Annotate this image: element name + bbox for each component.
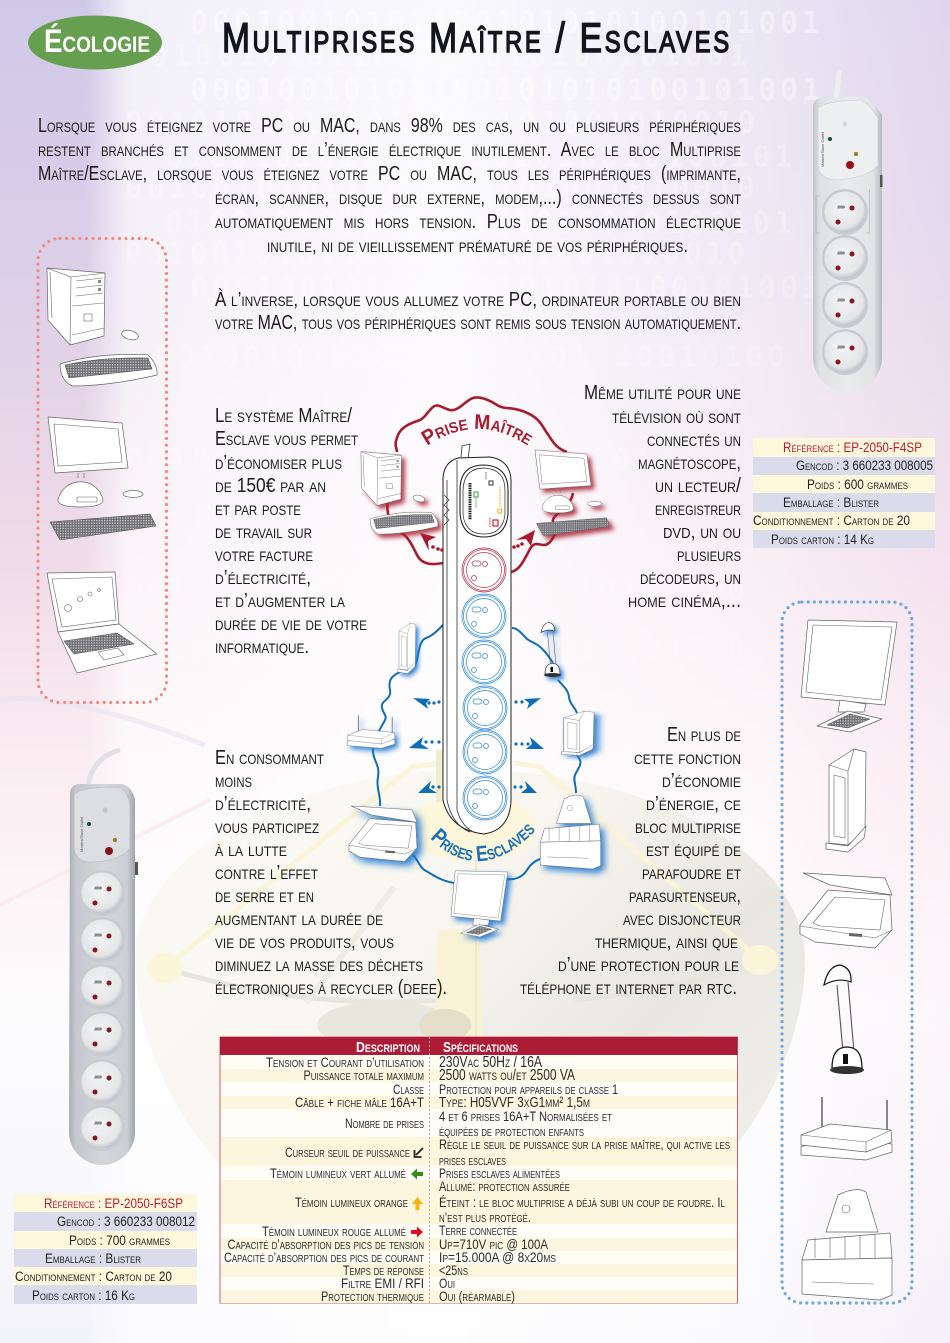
table: référence F4SP: Emballage : Blister xyxy=(783,495,879,510)
table column: spécifications: Règle le seuil de puissance sur la prise maître, qui active les xyxy=(439,1136,730,1152)
text block: effet de serre: vie de vos produits, vous xyxy=(215,931,394,953)
icon: disque dur gauche xyxy=(398,623,416,673)
table column: description: Capacité d’absorption des pics de courant xyxy=(224,1249,424,1265)
table column: spécifications: Allumé: protection assurée xyxy=(439,1178,570,1194)
text block: effet de serre: En consommant xyxy=(215,747,324,769)
text block: effet de serre: de serre et en xyxy=(215,885,314,907)
text block: protection: d’économie xyxy=(662,770,741,792)
table column: spécifications: Oui xyxy=(439,1275,455,1291)
table: référence F4SP xyxy=(753,438,935,548)
text block: système maître esclave: Le système Maître/ xyxy=(215,405,352,427)
text block: système maître esclave: d’électricité, xyxy=(215,567,311,589)
page background: 00100101011001010101001010010 xyxy=(125,171,755,206)
table header: Spécifications xyxy=(443,1039,518,1056)
text block: protection: téléphone et internet par RTC. xyxy=(520,977,737,999)
icon: multiprise au trait xyxy=(443,444,511,834)
table: référence F4SP: Référence : EP-2050-F4SP xyxy=(783,440,922,455)
text block: effet de serre: à la lutte xyxy=(215,839,287,861)
page background: 010010101100101010100101001 xyxy=(150,39,747,74)
icon: flèche orange xyxy=(412,1197,423,1210)
page background: 00101010110010101101001010010 xyxy=(125,106,755,141)
table column: spécifications: 2500 watts ou/et 2500 VA xyxy=(439,1067,575,1084)
text block: effet de serre: vous participez xyxy=(215,816,319,838)
text block: télévision: télévision où sont xyxy=(612,406,741,428)
table column: spécifications: Prises esclaves alimentées xyxy=(439,1165,560,1181)
icon: écran centre xyxy=(451,871,508,937)
intro paragraph: Lorsque vous éteignez votre PC ou MAC, dans 98% des cas, un ou plusieurs périphériques xyxy=(38,115,741,137)
icon: PC maître xyxy=(361,452,438,534)
icon: disque dur xyxy=(826,749,866,852)
text block: système maître esclave: Esclave vous permet xyxy=(215,428,358,450)
text block: effet de serre xyxy=(215,747,447,999)
page background: 00010010101100101010100101001 xyxy=(190,6,820,41)
panel: ordinateurs maîtres xyxy=(38,238,166,702)
table column: description: Puissance totale maximum xyxy=(304,1067,424,1083)
text block: télévision: DVD, un ou xyxy=(663,521,741,543)
intro paragraph: Maître/Esclave, lorsque vous éteignez votre PC ou MAC, tous les périphériques (imprimante, xyxy=(38,163,741,185)
table column: description: Protection thermique xyxy=(321,1288,424,1304)
table column: spécifications: n’est plus protégé. xyxy=(439,1209,531,1225)
page background: 001001010100101010100101001001 xyxy=(125,443,785,478)
table column: spécifications: 230Vac 50Hz / 16A xyxy=(439,1054,542,1071)
page background: 00100101010010101001010100100 xyxy=(125,573,745,608)
intro paragraph: inutile, ni de vieillissement prématuré de vos périphériques. xyxy=(267,235,688,257)
curved label: prise maître: Prise Maître xyxy=(420,414,532,446)
icon: écran maître xyxy=(535,450,611,536)
icon: disque dur droit xyxy=(561,711,594,755)
icon: flèche verte xyxy=(411,1168,423,1180)
table column: description: Nombre de prises xyxy=(345,1115,424,1131)
arrows: sorties esclaves xyxy=(409,698,544,793)
icon: lampe centre xyxy=(541,622,561,677)
icon: PC tour xyxy=(47,268,105,345)
table column: spécifications: Oui (réarmable) xyxy=(439,1288,515,1304)
table column: description: Câble + fiche mâle 16A+T xyxy=(295,1094,424,1110)
table column: spécifications: Type: H05VVF 3xG1mm² 1,5m xyxy=(439,1094,590,1111)
text block: protection: thermique, ainsi que xyxy=(595,931,738,953)
table column: description: Filtre EMI / RFI xyxy=(341,1275,424,1291)
icon: flèche curseur xyxy=(414,1148,423,1157)
text block: système maître esclave: informatique. xyxy=(215,636,309,658)
second paragraph: À l’inverse, lorsque vous allumez votre PC, ordinateur portable ou bien xyxy=(215,288,741,311)
table column: spécifications: Protection pour appareils de classe 1 xyxy=(439,1081,618,1097)
page background: 01001010110010101010010100101 xyxy=(165,140,792,175)
table column: description: Témoin lumineux rouge allumé xyxy=(262,1223,406,1239)
text block: effet de serre: moins xyxy=(215,770,252,792)
text block: télévision: enregistreur xyxy=(655,498,741,520)
icon: souris xyxy=(121,328,139,342)
table: référence F6SP: Référence : EP-2050-F6SP xyxy=(44,1196,183,1211)
table column: description: Témoin lumineux vert allumé xyxy=(270,1165,406,1181)
badge: Écologie: Écologie xyxy=(44,23,150,59)
table column: spécifications: Éteint : le bloc multiprise a déjà subi un coup de foudre. Il xyxy=(439,1194,725,1210)
table column: spécifications xyxy=(439,1054,730,1304)
text block: télévision: décodeurs, un xyxy=(640,567,741,589)
icon: imprimante centre xyxy=(540,795,601,869)
photo: multiprise 6 prises xyxy=(69,750,138,1165)
text block: protection: est équipé de xyxy=(646,839,741,861)
title: Multiprises Maître / Esclaves xyxy=(222,16,729,62)
text block: système maître esclave xyxy=(215,405,367,658)
text block: système maître esclave: et d’augmenter la xyxy=(215,590,346,612)
text block: télévision xyxy=(584,382,741,612)
text block: effet de serre: d’électricité, xyxy=(215,793,311,815)
text block: effet de serre: électroniques à recycler (DEEE). xyxy=(215,977,447,999)
page background: 00010010101100101010100101001 xyxy=(190,271,820,306)
text block: télévision: magnétoscope, xyxy=(638,452,741,474)
icon: scanner centre xyxy=(349,806,417,862)
icon: portable xyxy=(47,572,157,673)
wave: liaison prise maître xyxy=(387,397,573,572)
text block: système maître esclave: de 150€ par an xyxy=(215,475,326,497)
text block: télévision: un lecteur/ xyxy=(655,475,741,497)
second paragraph: votre MAC, tous vos périphériques sont remis sous tension automatiquement. xyxy=(215,312,741,334)
table column: spécifications: équipées de protection enfants xyxy=(439,1123,584,1139)
text block: protection: parasurtenseur, xyxy=(629,885,741,907)
table: description et spécifications xyxy=(220,1037,738,1304)
table header: Description xyxy=(356,1039,420,1056)
table column: spécifications: Ip=15.000A @ 8x20ms xyxy=(439,1249,556,1265)
text block: protection: d’énergie, ce xyxy=(646,793,741,815)
table: référence F6SP: Conditionnement : Carton de 20 xyxy=(15,1269,172,1284)
icon: lampe xyxy=(824,965,864,1074)
icon: scanner xyxy=(800,873,892,948)
photo: multiprise 4 prises: Master/Slave Outlet xyxy=(820,131,825,167)
text block: système maître esclave: votre facture xyxy=(215,544,313,566)
text block: protection: bloc multiprise xyxy=(635,816,741,838)
text block: effet de serre: contre l’effet xyxy=(215,862,318,884)
intro paragraph xyxy=(38,115,741,257)
page background: 00100101011001010101001010010 xyxy=(125,237,745,272)
table header xyxy=(356,1039,518,1056)
decorative globe behind the diagram xyxy=(0,698,805,1270)
wave: liaison prises esclaves xyxy=(373,625,580,883)
text block: télévision: home cinéma,... xyxy=(628,590,741,612)
text block: système maître esclave: durée de vie de votre xyxy=(215,613,367,635)
table column: spécifications: prises esclaves xyxy=(439,1152,506,1168)
page background: 00100101010110010101010010100 xyxy=(155,340,785,375)
table column: description xyxy=(224,1054,424,1304)
table column: description: Capacité d’absorption des pics de tension xyxy=(228,1236,424,1252)
text block: télévision: plusieurs xyxy=(677,544,741,566)
table: référence F6SP: Gencod : 3 660233 008012 xyxy=(57,1214,195,1229)
text block: protection: avec disjoncteur xyxy=(623,908,741,930)
icon: iMac xyxy=(48,417,156,540)
table: référence F4SP: Conditionnement : Carton de 20 xyxy=(753,513,910,528)
second paragraph xyxy=(215,288,741,334)
table: référence F6SP: Poids : 700 grammes xyxy=(69,1233,170,1248)
table column: spécifications: <25ns xyxy=(439,1262,468,1278)
table: référence F6SP xyxy=(14,1194,197,1304)
table column: spécifications: 4 et 6 prises 16A+T Normalisées et xyxy=(439,1108,612,1124)
text block: protection: En plus de xyxy=(667,724,741,746)
table column: description: Témoin lumineux orange xyxy=(295,1194,408,1210)
page background: 00100101010010101001010100100 xyxy=(125,633,745,668)
text block: système maître esclave: d’économiser plus xyxy=(215,452,342,474)
text block: télévision: connectés un xyxy=(647,429,741,451)
arrows: sortie maître xyxy=(420,530,535,552)
intro paragraph: automatiquement mis hors tension. Plus de consommation électrique xyxy=(215,211,741,233)
curved label: prises esclaves xyxy=(431,824,534,862)
icon: routeur xyxy=(801,1097,892,1160)
intro paragraph: restent branchés et consomment de l’énergie électrique inutilement. Avec le bloc Multiprise xyxy=(38,139,741,161)
text block: protection xyxy=(520,724,741,999)
panel: périphériques esclaves xyxy=(782,602,912,1303)
icon: flèche rouge xyxy=(411,1226,423,1238)
text block: système maître esclave: et par poste xyxy=(215,498,301,520)
intro paragraph: écran, scanner, disque dur externe, modem,...) connectés dessus sont xyxy=(215,187,741,209)
page background: 00010010101100101010100101001 xyxy=(190,73,820,108)
text block: effet de serre: augmentant la durée de xyxy=(215,908,383,930)
text block: protection: cette fonction xyxy=(634,747,741,769)
curved label: prises esclaves: Prises Esclaves xyxy=(431,824,534,862)
table column: description: Tension et Courant d’utilisation xyxy=(266,1054,424,1070)
icon: écran xyxy=(801,620,897,732)
table column: description: Temps de réponse xyxy=(343,1262,424,1278)
badge: Écologie xyxy=(28,16,162,70)
text block: protection: parafoudre et xyxy=(642,862,741,884)
icon: clavier xyxy=(60,354,157,386)
icon: routeur centre xyxy=(348,715,395,748)
table: référence F6SP: Poids carton : 16 Kg xyxy=(32,1288,135,1303)
table column: spécifications: Terre connectée xyxy=(439,1222,517,1238)
diagram: connexions maître esclaves xyxy=(348,397,611,937)
text block: protection: d’une protection pour le xyxy=(558,954,739,976)
icon: imprimante xyxy=(802,1190,892,1300)
table: référence F4SP: Poids : 600 grammes xyxy=(807,477,908,492)
photo: multiprise 6 prises: Master/Slave Outlet xyxy=(79,816,84,852)
text block: télévision: Même utilité pour une xyxy=(584,382,741,404)
text block: effet de serre: diminuez la masse des déchets xyxy=(215,954,423,976)
table column: spécifications: Up=710V pic @ 100A xyxy=(439,1236,549,1252)
table: référence F4SP: Poids carton : 14 Kg xyxy=(771,532,874,547)
table column: description: Classe xyxy=(393,1081,424,1097)
photo: multiprise 4 prises xyxy=(813,70,882,392)
page background: 01001010110010101010010100101 xyxy=(165,206,792,241)
table: référence F6SP: Emballage : Blister xyxy=(45,1251,141,1266)
text block: système maître esclave: de travail sur xyxy=(215,521,312,543)
table column: description: Curseur seuil de puissance xyxy=(285,1144,410,1160)
